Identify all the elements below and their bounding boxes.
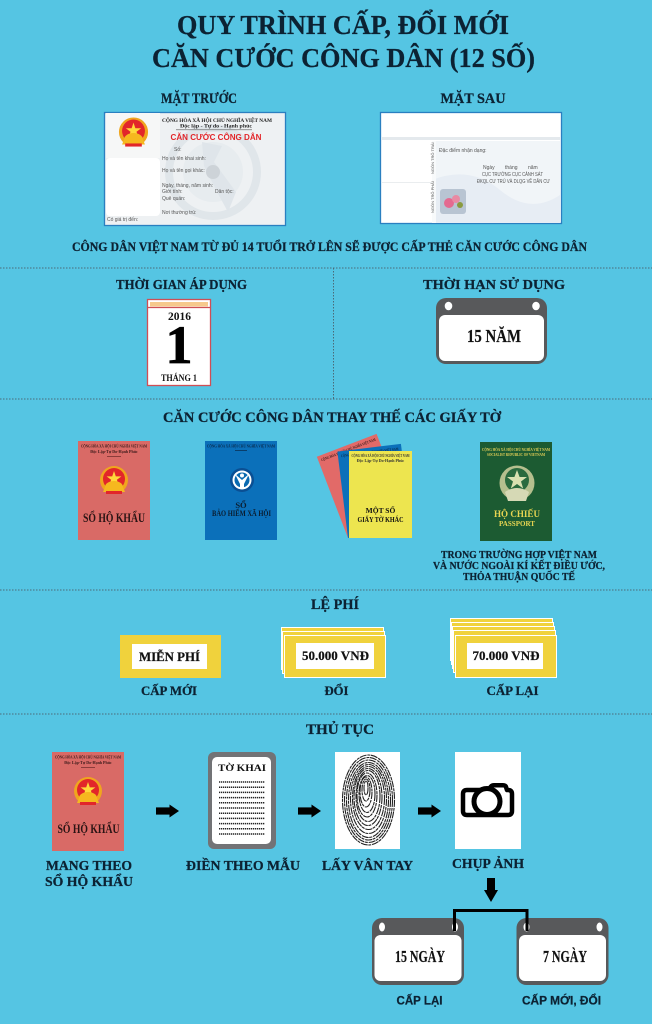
- heading: front: MẶT TRƯỚC: [161, 90, 237, 107]
- card: front: Số:: [174, 147, 182, 153]
- card: front: CỘNG HÒA XÃ HỘI CHỦ NGHĨA VIỆT NAM: [162, 116, 273, 124]
- icon: calendar 15 years: 15 NĂM: [467, 326, 521, 346]
- card: back: năm: [528, 165, 538, 171]
- panel: replaced documents: [78, 409, 605, 583]
- card: back: Đặc điểm nhận dạng:: [439, 147, 487, 154]
- step: fingerprint: LẤY VÂN TAY: [322, 857, 413, 874]
- card: back: NGÓN TRỎ TRÁI: [430, 142, 435, 174]
- heading: application date: THỜI GIAN ÁP DỤNG: [116, 276, 247, 293]
- arrow: [156, 804, 179, 818]
- calendar: 7 days: 7 NGÀY: [543, 947, 587, 966]
- fee: free: CẤP MỚI: [141, 683, 197, 698]
- step: photo: CHỤP ẢNH: [452, 855, 524, 872]
- booklet: passport: [480, 442, 552, 541]
- booklets: other papers: CỘNG HÒA XÃ HỘI CHỦ NGHĨA VIỆT NAM: [341, 446, 399, 458]
- icon: tear-off calendar: 1: [166, 315, 192, 375]
- step: fill in form: [186, 752, 300, 874]
- booklet: household register: SỔ HỘ KHẨU: [83, 510, 145, 525]
- arrow: [418, 804, 441, 818]
- panel: fees: [120, 596, 556, 698]
- booklets: other papers: Độc Lập-Tự Do-Hạnh Phúc: [357, 458, 404, 463]
- fee: reissue 70000: [450, 618, 556, 698]
- title: QUY TRÌNH CẤP, ĐỔI MỚI: [177, 9, 509, 40]
- title: CĂN CƯỚC CÔNG DÂN (12 SỐ): [152, 42, 535, 73]
- fee: free: [120, 635, 221, 698]
- booklet: social insurance: SỔ: [235, 500, 247, 510]
- card: front: Dân tộc:: [215, 189, 234, 195]
- icon: tear-off calendar: 2016: [168, 311, 191, 323]
- booklet: social insurance: [205, 441, 277, 540]
- heading: fees: LỆ PHÍ: [311, 596, 359, 613]
- step: bring household register: [45, 752, 133, 890]
- calendar: 15 days: [372, 918, 464, 1008]
- heading: procedure: THỦ TỤC: [306, 721, 374, 738]
- step: bring household register: SỔ HỘ KHẨU: [45, 872, 133, 890]
- panel: validity: [423, 276, 565, 364]
- booklet: passport: SOCIALIST REPUBLIC OF VIETNAM: [487, 453, 545, 457]
- booklets: other papers: [317, 434, 412, 538]
- panel: procedure: [45, 721, 608, 1008]
- step: fill in form: ĐIỀN THEO MẪU: [186, 856, 300, 874]
- booklet: passport: PASSPORT: [499, 521, 535, 528]
- fee: replacement 50000: ĐỔI: [324, 683, 349, 698]
- booklet: passport: HỘ CHIẾU: [494, 507, 540, 520]
- text block: eligibility: CÔNG DÂN VIỆT NAM TỪ ĐỦ 14 TUỔI TRỞ LÊN SẼ ĐƯỢC CẤP THẺ CĂN CƯỚC CÔNG DÂN: [72, 239, 587, 254]
- calendar: 15 days: 15 NGÀY: [395, 947, 445, 966]
- text block: passport note: VÀ NƯỚC NGOÀI KÍ KẾT ĐIỀU ƯỚC,: [433, 559, 605, 572]
- card: front: Họ và tên khai sinh:: [162, 156, 206, 162]
- booklets: other papers: CỘNG HÒA XÃ HỘI CHỦ NGHĨA VIỆT NAM: [320, 437, 376, 462]
- card: front: [104, 112, 286, 226]
- booklets: other papers: CỘNG HÒA XÃ HỘI CHỦ NGHĨA VIỆT NAM: [352, 453, 410, 458]
- arrow: down: [484, 878, 498, 902]
- fee: reissue 70000: CẤP LẠI: [486, 683, 539, 698]
- card: back: Ngày: [483, 165, 495, 171]
- booklet: household register: [78, 441, 150, 540]
- card: front: Họ và tên gọi khác:: [162, 168, 205, 174]
- heading: replaced documents: CĂN CƯỚC CÔNG DÂN THAY THẾ CÁC GIẤY TỜ: [163, 409, 502, 426]
- heading: validity: THỜI HẠN SỬ DỤNG: [423, 276, 565, 293]
- calendar: 7 days: [516, 918, 608, 1008]
- card: back: NGÓN TRỎ PHẢI: [430, 181, 435, 213]
- fee: replacement 50000: [282, 628, 386, 698]
- booklet: social insurance: CỘNG HÒA XÃ HỘI CHỦ NGHĨA VIỆT NAM: [207, 444, 276, 448]
- heading: back: MẶT SAU: [440, 90, 506, 107]
- calendar: 7 days: CẤP MỚI, ĐỔI: [522, 992, 601, 1008]
- fee: free: MIỄN PHÍ: [139, 649, 200, 664]
- icon: calendar 15 years: [436, 298, 547, 364]
- card: front: CĂN CƯỚC CÔNG DÂN: [170, 133, 262, 142]
- card: front: Có giá trị đến:: [107, 217, 138, 223]
- card: back: [380, 112, 562, 224]
- card: back: ĐKQL CƯ TRÚ VÀ DLQG VỀ DÂN CƯ: [477, 178, 551, 185]
- panel: application date: [116, 276, 247, 386]
- panel: front of card: [104, 90, 286, 226]
- arrow: [298, 804, 321, 818]
- title: [152, 9, 535, 73]
- card: front: Độc lập - Tự do - Hạnh phúc: [180, 124, 253, 130]
- step: fingerprint: [322, 752, 413, 874]
- text block: passport note: TRONG TRƯỜNG HỢP VIỆT NAM: [441, 548, 597, 561]
- card: back: CỤC TRƯỞNG CỤC CẢNH SÁT: [482, 171, 543, 178]
- card: back: tháng: [505, 165, 518, 171]
- calendar: 15 days: CẤP LẠI: [396, 992, 442, 1008]
- icon: tear-off calendar: THÁNG 1: [161, 373, 197, 383]
- booklets: other papers: MỘT SỐ: [366, 505, 395, 515]
- panel: back of card: [380, 90, 562, 224]
- connector: [454, 910, 527, 931]
- card: front: Nơi thường trú:: [162, 210, 196, 216]
- fee: replacement 50000: 50.000 VNĐ: [302, 649, 369, 663]
- step: fill in form: TỜ KHAI: [218, 762, 266, 774]
- fee: reissue 70000: 70.000 VNĐ: [472, 649, 540, 663]
- card: front: Ngày, tháng, năm sinh:: [162, 183, 213, 189]
- icon: tear-off calendar: [148, 300, 210, 386]
- step: photo: [452, 752, 524, 872]
- text block: passport note: [433, 548, 605, 583]
- step: bring household register: MANG THEO: [46, 859, 132, 874]
- card: front: Giới tính:: [162, 189, 183, 195]
- booklet: passport: CỘNG HÒA XÃ HỘI CHỦ NGHĨA VIỆT NAM: [482, 447, 550, 452]
- step: bring household register: SỔ HỘ KHẨU: [58, 821, 120, 836]
- booklets: other papers: GIẤY TỜ KHÁC: [358, 514, 404, 524]
- text block: passport note: THỎA THUẬN QUỐC TẾ: [463, 570, 575, 583]
- booklet: social insurance: BẢO HIỂM XÃ HỘI: [212, 508, 272, 518]
- card: front: Quê quán:: [162, 196, 185, 202]
